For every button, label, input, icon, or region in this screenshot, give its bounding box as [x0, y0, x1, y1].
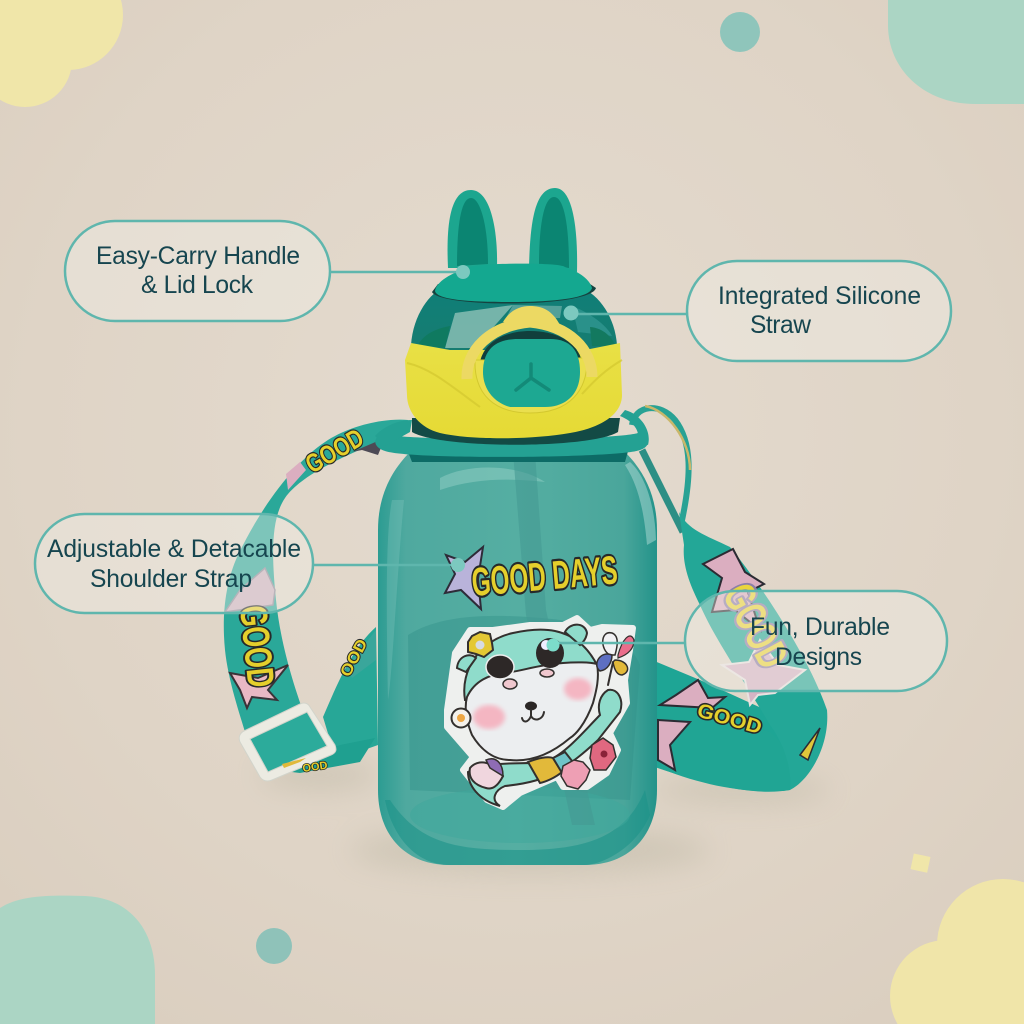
leader line [571, 313, 687, 315]
sticker white face [466, 662, 598, 760]
anchor dot [564, 306, 578, 320]
pink flower [561, 760, 590, 789]
scarf mustard stripe [528, 757, 562, 783]
callout: Integrated Silicone Straw [564, 261, 951, 361]
strap print below buckle [282, 758, 306, 768]
bottom ring [410, 787, 630, 843]
decoration: top-right mint blob [888, 0, 1024, 104]
right shoulder strap [632, 406, 827, 792]
button Y mark [516, 364, 549, 390]
lower band star [660, 680, 725, 708]
left cheek [473, 705, 505, 729]
dome lower green right [590, 327, 616, 346]
right edge highlight [625, 462, 656, 545]
strap edge print [800, 728, 820, 760]
callout: Adjustable & Detacable Shoulder Strap [35, 514, 465, 613]
left side ear ring [452, 708, 470, 728]
rear strap section [323, 627, 378, 760]
bottle shadow [260, 759, 830, 874]
ear right [565, 625, 587, 645]
anchor dot [546, 638, 560, 652]
neck ring [375, 432, 648, 457]
yellow collar [405, 343, 622, 438]
strap print: lower star [722, 640, 805, 705]
scarf purple [486, 759, 503, 776]
left shoulder strap [224, 420, 408, 781]
pill [687, 261, 951, 361]
hamster sticker [447, 618, 634, 807]
left shoulder strap: OOD [338, 637, 371, 680]
lower strap band behind bottle [640, 655, 800, 792]
handle dark recess [480, 331, 582, 362]
dome upper window strip [505, 305, 562, 320]
pill [65, 221, 330, 321]
ear right [529, 188, 577, 272]
pinwheel [597, 633, 634, 685]
GOOD DAYS logo [445, 547, 619, 609]
anchor dot [456, 265, 470, 279]
neck shadow [405, 444, 630, 462]
decoration: top-left yellow cloud [0, 0, 123, 107]
front strap band [224, 420, 408, 735]
decoration: bottom-left mint blob [0, 896, 155, 1024]
strap print: star [703, 549, 764, 630]
right cheek [564, 678, 592, 700]
callout: Easy-Carry Handle & Lid Lock [65, 221, 470, 321]
strap print: GOOD: GOOD [713, 576, 798, 676]
pill [685, 591, 947, 691]
callout: Fun, Durable Designs [546, 591, 947, 691]
body lower reflection [385, 790, 650, 865]
teal button [483, 339, 580, 407]
dome [411, 287, 617, 355]
pill [35, 514, 313, 613]
lid dark rim [432, 284, 596, 304]
buckle [239, 703, 336, 781]
flower yellow [468, 632, 493, 657]
ear left inner [457, 198, 488, 266]
shoulder highlight [440, 467, 545, 490]
left shoulder strap: OOD [302, 760, 328, 775]
label: Easy-Carry Handle [96, 243, 300, 270]
straw [513, 452, 595, 825]
lid top [435, 264, 592, 302]
left eye [486, 655, 514, 679]
ear left [457, 655, 476, 672]
eye highlight [541, 640, 551, 650]
button surround [475, 358, 587, 413]
red flower [590, 738, 616, 770]
ear marks [503, 679, 517, 689]
decoration: top dot [720, 12, 760, 52]
lower band text: GOOD [695, 700, 764, 739]
bottle [375, 410, 657, 865]
flower yellow centre [476, 640, 484, 650]
orange dot [457, 714, 465, 722]
flower centres [600, 750, 608, 758]
ear left [448, 190, 497, 268]
strap print: pink star [230, 665, 288, 708]
dome right light [572, 306, 612, 336]
arm and scarf [468, 690, 621, 806]
sticker white border [447, 618, 633, 807]
collar bottom dark rim [412, 418, 620, 445]
right eye [536, 638, 564, 668]
dome window highlight [445, 305, 513, 348]
strap through buckle [250, 712, 328, 772]
logo text: GOOD DAYS [470, 548, 619, 605]
label: Designs [775, 644, 862, 671]
body inner darker water shade [408, 616, 640, 800]
strap print: vertical GOOD: GOOD [231, 604, 281, 689]
label: Fun, Durable [750, 614, 890, 641]
leader line [552, 642, 685, 644]
label: Shoulder Strap [90, 566, 252, 593]
sticker mint head [464, 630, 597, 700]
label: & Lid Lock [141, 272, 254, 299]
ear right inner [539, 197, 569, 268]
scarf pink end [470, 762, 503, 788]
strap print: pale star [225, 568, 275, 612]
dome lower green left [418, 326, 450, 348]
lower band star 2 [658, 720, 690, 770]
label: Adjustable & Detacable [47, 536, 301, 563]
decoration: bottom dot [256, 928, 292, 964]
bottle body [378, 452, 657, 865]
decoration: bottom-right yellow cloud [890, 879, 1024, 1024]
leader line [330, 271, 463, 273]
scarf blue stripe [553, 752, 576, 773]
nose and mouth [522, 702, 544, 722]
wide strap band [679, 512, 827, 790]
strap print: upper dark star [352, 438, 385, 455]
bottle lid [405, 188, 622, 445]
label: Integrated Silicone [718, 283, 921, 310]
anchor dot [451, 558, 465, 572]
logo star [445, 547, 483, 609]
left edge light [387, 500, 404, 700]
strap print: upper GOOD: GOOD [300, 422, 369, 479]
collar crease [407, 360, 622, 407]
label: Straw [750, 312, 811, 339]
thin strap loop [632, 408, 689, 525]
strap print: upper star [286, 462, 306, 490]
leader line [313, 564, 458, 566]
yellow handle [467, 306, 592, 379]
decoration: small yellow square [911, 854, 930, 873]
